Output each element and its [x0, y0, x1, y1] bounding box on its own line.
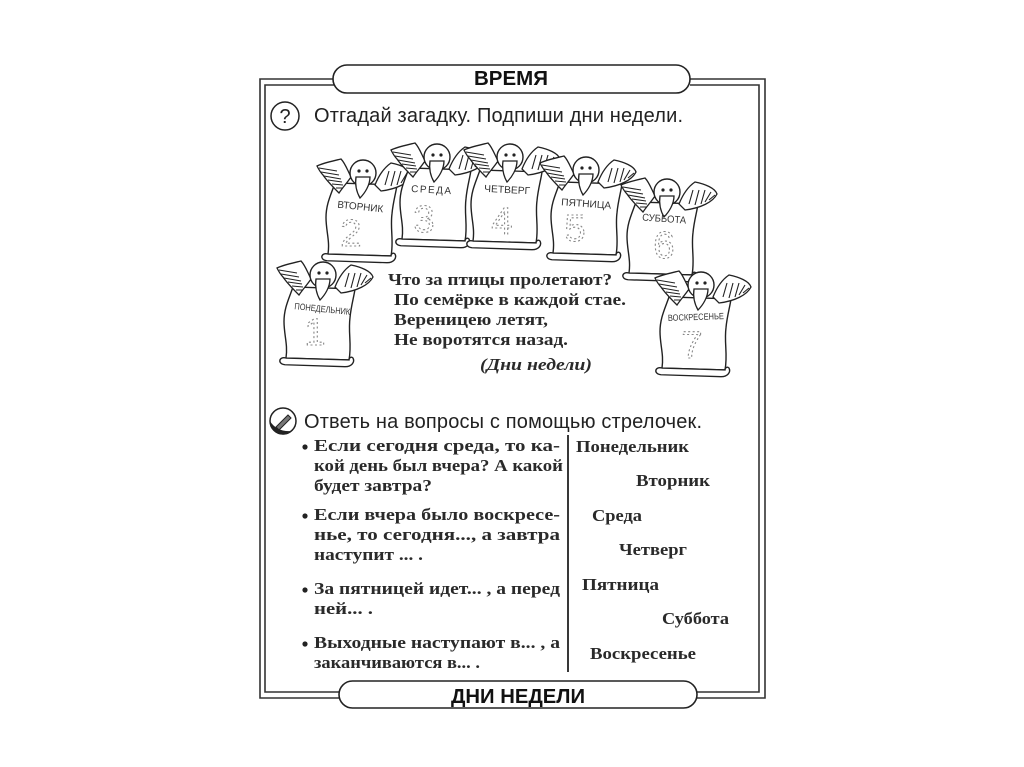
title: Время: ВРЕМЯ	[474, 68, 548, 90]
scroll: Вторник	[317, 159, 413, 263]
icon: pencil	[270, 408, 296, 435]
scroll: Пятница: ПЯТНИЦА	[561, 197, 612, 212]
column divider	[567, 435, 569, 672]
icon: question mark: ?	[279, 106, 291, 128]
footer title: Дни недели	[339, 681, 697, 708]
questions instruction heading: Ответь на вопросы с помощью стрелочек.	[304, 411, 702, 433]
days of week list: Вторник	[636, 471, 710, 490]
riddle poem: По семёрке в каждой стае.	[394, 290, 626, 309]
question 2: Если вчера было воскресе-	[314, 505, 560, 524]
question 3: За пятницей идет... , а перед	[314, 579, 560, 598]
days of week list	[576, 437, 730, 663]
scroll: Вторник: ВТОРНИК	[337, 200, 384, 215]
riddle poem: Не воротятся назад.	[394, 330, 568, 349]
days of week list: Понедельник	[576, 437, 689, 456]
question 1: будет завтра?	[314, 476, 432, 495]
questions column	[302, 436, 563, 672]
question 1: кой день был вчера? А какой	[314, 456, 563, 475]
question 2	[302, 505, 561, 564]
title: Время	[333, 65, 690, 93]
riddle poem	[388, 270, 626, 374]
scroll: Суббота: 6	[653, 225, 675, 267]
question 1: Если сегодня среда, то ка-	[314, 436, 560, 455]
scroll: Пятница: 5	[564, 208, 586, 250]
scroll: Пятница	[540, 156, 636, 262]
days of week list: Среда	[592, 506, 643, 525]
scroll: Среда: СРЕДА	[411, 184, 452, 197]
riddle poem: Вереницею летят,	[394, 310, 548, 329]
question 2: наступит ... .	[314, 545, 423, 564]
days of week list: Пятница	[582, 575, 660, 594]
riddle instruction heading: Отгадай загадку. Подпиши дни недели.	[314, 105, 683, 127]
riddle poem: (Дни недели)	[480, 355, 592, 374]
scroll: Четверг	[464, 143, 560, 250]
scroll: Воскресенье	[655, 271, 751, 377]
question 1	[302, 436, 563, 495]
scroll: Воскресенье: 7	[681, 325, 703, 367]
question 4	[302, 633, 561, 672]
days of week list: Четверг	[619, 540, 687, 559]
question 4: Выходные наступают в... , а	[314, 633, 561, 652]
page frame	[260, 79, 765, 698]
scroll: Понедельник: ПОНЕДЕЛЬНИК	[294, 301, 351, 317]
scroll: Суббота	[621, 178, 717, 282]
icon: question mark	[271, 102, 299, 130]
scroll: Понедельник: 1	[304, 312, 326, 354]
scroll: Среда: 3	[413, 199, 435, 241]
question 4: заканчиваются в... .	[314, 653, 480, 672]
question 2: нье, то сегодня..., а завтра	[314, 525, 561, 544]
scroll: Понедельник	[277, 261, 373, 367]
question 3: ней... .	[314, 599, 373, 618]
scroll: Вторник: 2	[340, 213, 362, 255]
footer title: Дни недели: ДНИ НЕДЕЛИ	[451, 686, 585, 708]
scroll: Среда	[391, 143, 487, 248]
scroll: Четверг: ЧЕТВЕРГ	[484, 184, 531, 197]
scroll: Четверг: 4	[491, 201, 513, 243]
riddle poem: Что за птицы пролетают?	[388, 270, 612, 289]
scroll: Воскресенье: ВОСКРЕСЕНЬЕ	[668, 311, 724, 323]
days of week list: Воскресенье	[590, 644, 697, 663]
scroll: Суббота: СУББОТА	[642, 212, 687, 227]
days of week list: Суббота	[662, 609, 730, 628]
question 3	[302, 579, 560, 618]
